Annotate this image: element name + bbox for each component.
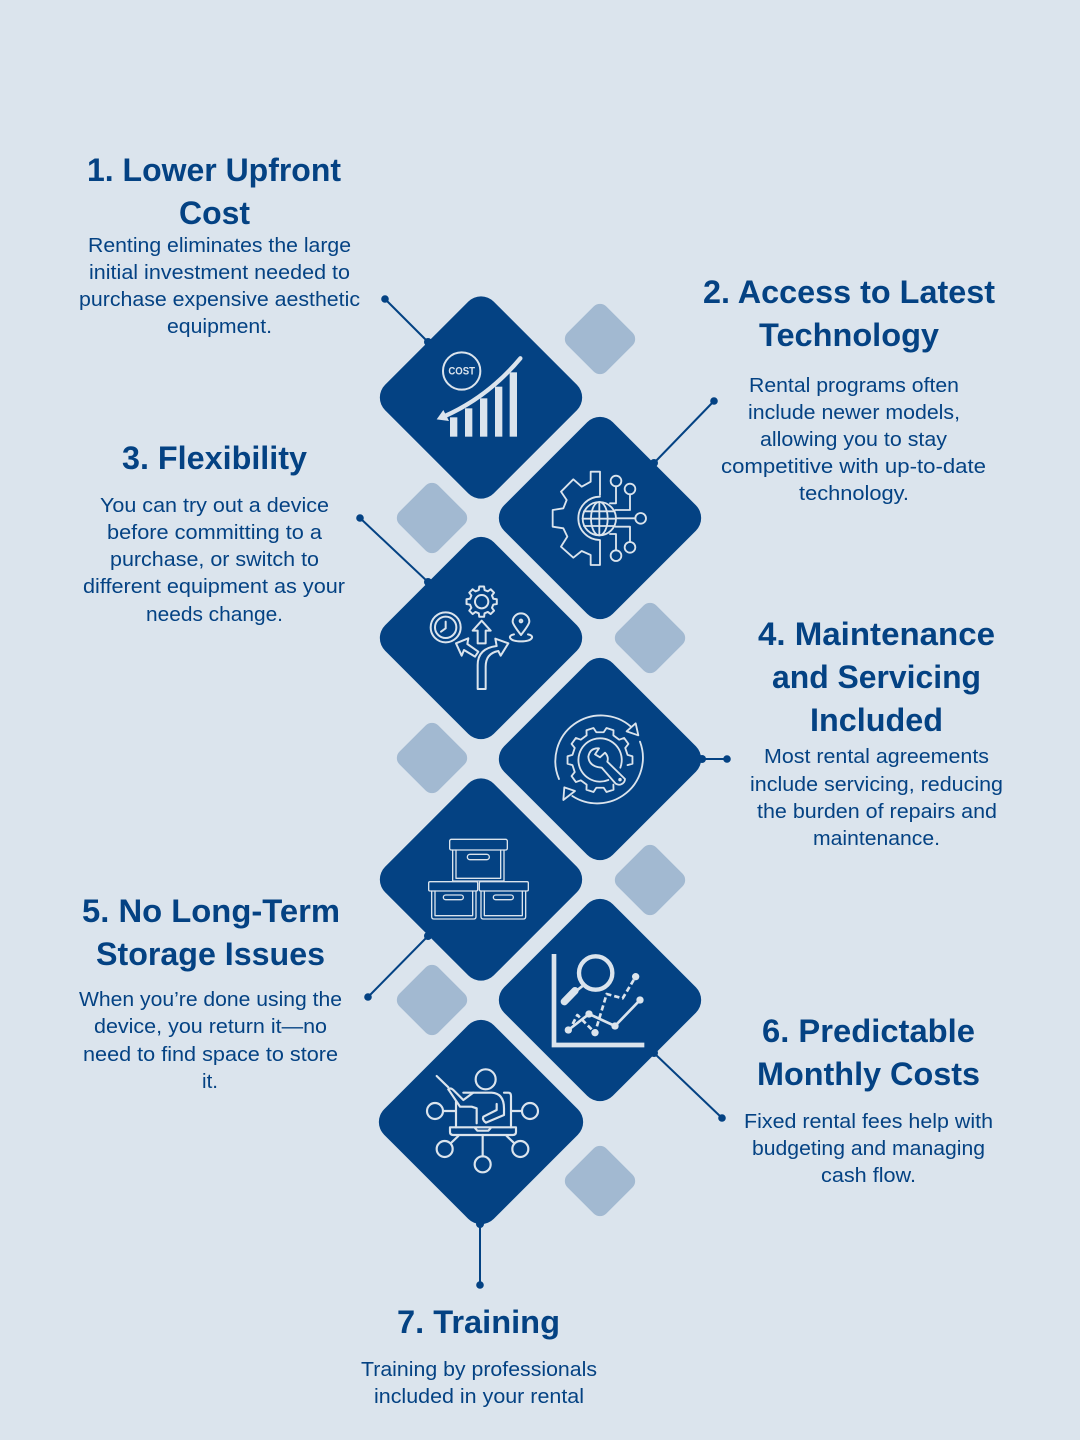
heading 5 (82, 893, 340, 972)
text block 3: purchase, or switch to (110, 549, 319, 571)
icon: magnifier over line chart (554, 954, 644, 1045)
text block 4: Most rental agreements (764, 746, 989, 768)
text block 6: Fixed rental fees help with (744, 1111, 993, 1133)
text block 1: equipment. (167, 316, 272, 338)
panel: 6 predictable monthly costs (491, 891, 993, 1187)
text block 5: When you’re done using the (79, 989, 342, 1011)
heading 6: 6. Predictable (762, 1013, 975, 1049)
text block 3: needs change. (146, 604, 283, 626)
panel: 2 access to latest technology (491, 274, 995, 627)
text block 1 (79, 235, 360, 338)
heading 6: Monthly Costs (757, 1056, 980, 1092)
connector 6 (650, 1049, 726, 1122)
diamond 3 (372, 529, 590, 747)
connector 4 (698, 755, 731, 763)
text block 4: include servicing, reducing (750, 774, 1003, 796)
text block 2 (721, 375, 986, 505)
diamond 5 (372, 771, 590, 988)
heading 4: Included (810, 702, 943, 738)
connector 5 (364, 932, 432, 1001)
text block 6: cash flow. (821, 1165, 916, 1187)
text block 4: maintenance. (813, 828, 940, 850)
text block 3: You can try out a device (100, 495, 329, 517)
text block 6 (744, 1111, 993, 1187)
text block 4 (750, 746, 1003, 850)
heading 4: 4. Maintenance (758, 616, 995, 652)
diamond 2 (491, 409, 709, 627)
text block 5: it. (202, 1071, 218, 1093)
diamond 1 (372, 289, 590, 506)
text block 2: allowing you to stay (760, 429, 947, 451)
diamond 6 (491, 891, 709, 1109)
panel: 7 training (361, 1012, 597, 1408)
heading 2: 2. Access to Latest (703, 274, 995, 310)
icon: cost reduction chart (437, 352, 520, 437)
text block 1: purchase expensive aesthetic (79, 289, 360, 311)
connector 3 (356, 514, 432, 586)
heading 2 (703, 274, 995, 353)
decorative small diamonds (393, 300, 689, 1220)
panel: 3 flexibility (83, 440, 590, 747)
text block 7: Training by professionals (361, 1359, 597, 1381)
connector 7 (476, 1220, 484, 1289)
text block 2: Rental programs often (749, 375, 959, 397)
text block 5: device, you return it—no (94, 1016, 327, 1038)
icon: trainer with network nodes (427, 1069, 538, 1172)
heading 1 (87, 152, 341, 231)
text block 4: the burden of repairs and (757, 801, 997, 823)
connector 2 (650, 397, 718, 467)
icon: decision paths (431, 587, 532, 689)
text block 7: included in your rental (374, 1386, 584, 1408)
text block 6: budgeting and managing (752, 1138, 985, 1160)
panel: 5 no long-term storage issues (79, 771, 590, 1093)
icon: gear globe circuit (553, 472, 646, 565)
icon: wrench in gear cycle (555, 715, 643, 803)
text block 5 (79, 989, 342, 1093)
text block 1: initial investment needed to (89, 262, 350, 284)
connector 1 (381, 295, 432, 346)
heading 2: Technology (759, 317, 939, 353)
text block 3: before committing to a (107, 522, 323, 544)
heading 1: Cost (179, 195, 250, 231)
heading 4 (758, 616, 995, 738)
heading 4: and Servicing (772, 659, 981, 695)
heading 6 (757, 1013, 980, 1092)
heading 5: Storage Issues (96, 936, 325, 972)
text block 2: competitive with up-to-date (721, 456, 986, 478)
heading 5: 5. No Long-Term (82, 893, 340, 929)
heading 3: 3. Flexibility (122, 440, 307, 476)
diamond 7 (371, 1012, 591, 1232)
text block 1: Renting eliminates the large (88, 235, 351, 257)
icon: cost reduction chart: COST (448, 366, 475, 378)
text block 3: different equipment as your (83, 576, 345, 598)
diamond 4 (491, 650, 709, 868)
text block 5: need to find space to store (83, 1044, 338, 1066)
panel: 1 lower upfront cost (79, 152, 590, 506)
text block 7 (361, 1359, 597, 1408)
text block 3 (83, 495, 345, 626)
panel: 4 maintenance and servicing (491, 616, 1003, 868)
text block 2: include newer models, (748, 402, 960, 424)
heading 7: 7. Training (397, 1304, 560, 1340)
heading 1: 1. Lower Upfront (87, 152, 341, 188)
icon: stacked storage boxes (429, 839, 528, 919)
text block 2: technology. (799, 483, 909, 505)
